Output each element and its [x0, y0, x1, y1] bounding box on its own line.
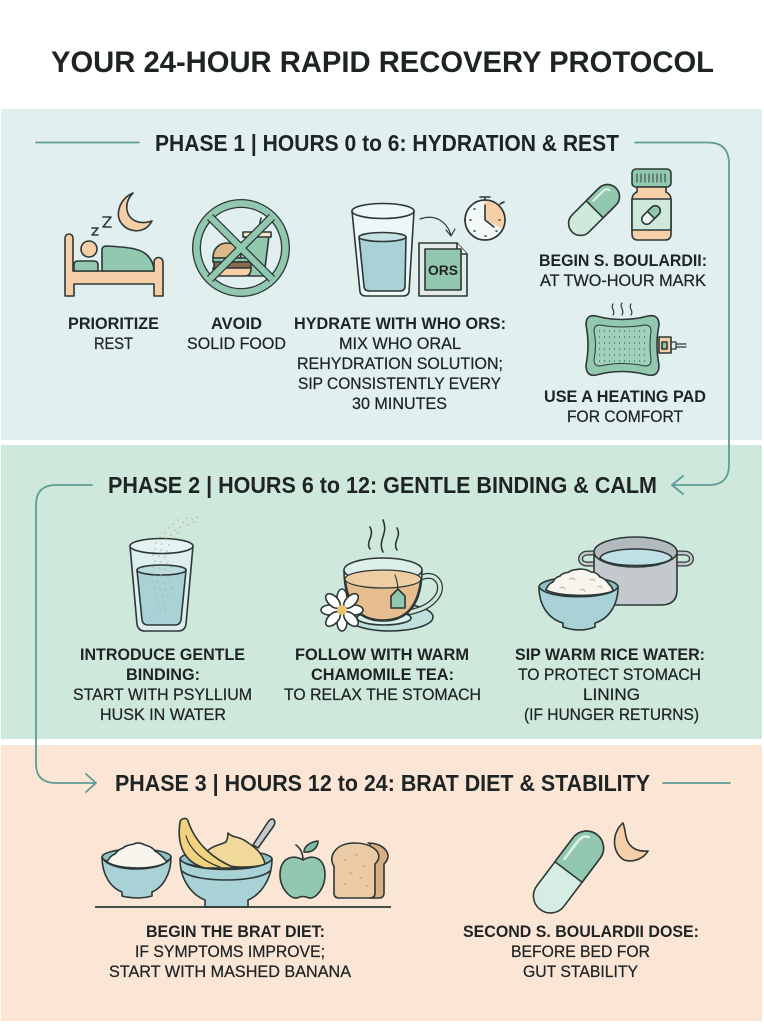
icon: capsule — [564, 180, 624, 240]
phase 2 label: gentle binding: BINDING: — [126, 666, 200, 684]
icon: stopwatch — [465, 197, 505, 240]
icon: rice bowl — [539, 569, 618, 630]
phase 2 label: gentle binding — [73, 646, 252, 724]
icon: rice bowl small — [102, 843, 171, 898]
phase 2 label: rice water — [515, 646, 705, 724]
phase 1 label: avoid solid food: SOLID FOOD — [187, 335, 286, 353]
phase 1 label: heating pad: FOR COMFORT — [567, 408, 683, 426]
phase 2 label: rice water: (IF HUNGER RETURNS) — [524, 706, 699, 724]
phase 2 label: rice water: SIP WARM RICE WATER: — [515, 646, 705, 664]
icon: bread — [332, 843, 388, 898]
phase 2 label: chamomile tea: FOLLOW WITH WARM — [295, 646, 469, 664]
icon: bed and moon — [65, 193, 163, 296]
phase 3 label: BRAT diet — [109, 923, 351, 981]
title: YOUR 24-HOUR RAPID RECOVERY PROTOCOL — [51, 46, 714, 79]
phase 1 label: begin S. boulardii — [539, 252, 707, 290]
phase 1 label: heating pad: USE A HEATING PAD — [544, 388, 706, 406]
icon: psyllium glass — [130, 516, 198, 631]
phase 2 label: chamomile tea — [284, 646, 481, 704]
icon: ORS packet: ORS — [428, 263, 458, 278]
phase 3 label: second dose — [463, 923, 699, 981]
phase 1 label: hydrate with WHO ORS: 30 MINUTES — [352, 395, 447, 413]
phase 1 label: prioritize rest: REST — [94, 335, 133, 353]
phase 3 heading: PHASE 3 | HOURS 12 to 24: BRAT DIET & STABILITY — [115, 770, 650, 796]
phase 1 label: avoid solid food — [187, 315, 286, 353]
phase 1 label: heating pad — [544, 388, 706, 426]
arrow: phase 1 to phase 2 — [635, 142, 729, 494]
phase 2 label: rice water: LINING — [583, 686, 640, 704]
phase 1 label: avoid solid food: AVOID — [211, 315, 262, 333]
phase 1 label: begin S. boulardii: BEGIN S. BOULARDII: — [539, 252, 707, 270]
phase 2 heading: PHASE 2 | HOURS 6 to 12: GENTLE BINDING & CALM — [108, 472, 657, 498]
phase 2 label: gentle binding: INTRODUCE GENTLE — [80, 646, 245, 664]
icon: capsule with moon — [527, 823, 648, 920]
phase 1 label: hydrate with WHO ORS: HYDRATE WITH WHO ORS: — [294, 315, 506, 333]
arrow: phase 3 tail line — [663, 782, 730, 784]
icon: ORS packet — [419, 243, 467, 296]
arrow: phase 2 to phase 3 — [36, 485, 96, 792]
phase 3 label: second dose: SECOND S. BOULARDII DOSE: — [463, 923, 699, 941]
icon: bowl with banana and mash — [179, 818, 272, 907]
icon: supplement bottle — [632, 169, 671, 240]
icon: no solid food — [196, 204, 286, 292]
phase 1 label: hydrate with WHO ORS: REHYDRATION SOLUTION; — [297, 355, 503, 373]
phase 1 label: prioritize rest — [68, 315, 159, 353]
phase 1 label: begin S. boulardii: AT TWO-HOUR MARK — [540, 272, 706, 290]
panel: phase 1 — [1, 109, 762, 440]
phase 2 label: chamomile tea: TO RELAX THE STOMACH — [284, 686, 481, 704]
phase 3 label: second dose: GUT STABILITY — [523, 963, 638, 981]
shelf line — [95, 906, 391, 908]
phase 1 label: hydrate with WHO ORS: SIP CONSISTENTLY EVERY — [298, 375, 501, 393]
icon: heating pad — [586, 303, 686, 375]
panel: phase 2 — [1, 445, 762, 739]
icon: daisy — [321, 589, 363, 631]
phase 2 label: gentle binding: HUSK IN WATER — [100, 706, 226, 724]
phase 1 label: hydrate with WHO ORS — [294, 315, 506, 413]
icon: pot of rice water — [581, 537, 691, 605]
phase 1 label: hydrate with WHO ORS: MIX WHO ORAL — [339, 335, 461, 353]
phase 1 heading: PHASE 1 | HOURS 0 to 6: HYDRATION & REST — [155, 130, 619, 156]
phase 3 label: BRAT diet: IF SYMPTOMS IMPROVE; — [135, 943, 325, 961]
panel: phase 3 — [1, 745, 762, 1021]
phase 2 label: chamomile tea: CHAMOMILE TEA: — [311, 666, 454, 684]
arrow: phase 1 lead line — [36, 142, 139, 144]
phase 2 label: rice water: TO PROTECT STOMACH — [518, 666, 701, 684]
phase 3 label: second dose: BEFORE BED FOR — [511, 943, 650, 961]
icon: spoon — [253, 819, 275, 848]
icon: glass of water — [352, 204, 414, 296]
icon: arrow to ORS packet — [420, 217, 455, 236]
icon: chamomile tea — [344, 520, 440, 631]
phase 2 label: gentle binding: START WITH PSYLLIUM — [73, 686, 252, 704]
phase 1 label: prioritize rest: PRIORITIZE — [68, 315, 159, 333]
icon: apple — [280, 841, 325, 898]
phase 3 label: BRAT diet: START WITH MASHED BANANA — [109, 963, 351, 981]
phase 3 label: BRAT diet: BEGIN THE BRAT DIET: — [146, 923, 325, 941]
